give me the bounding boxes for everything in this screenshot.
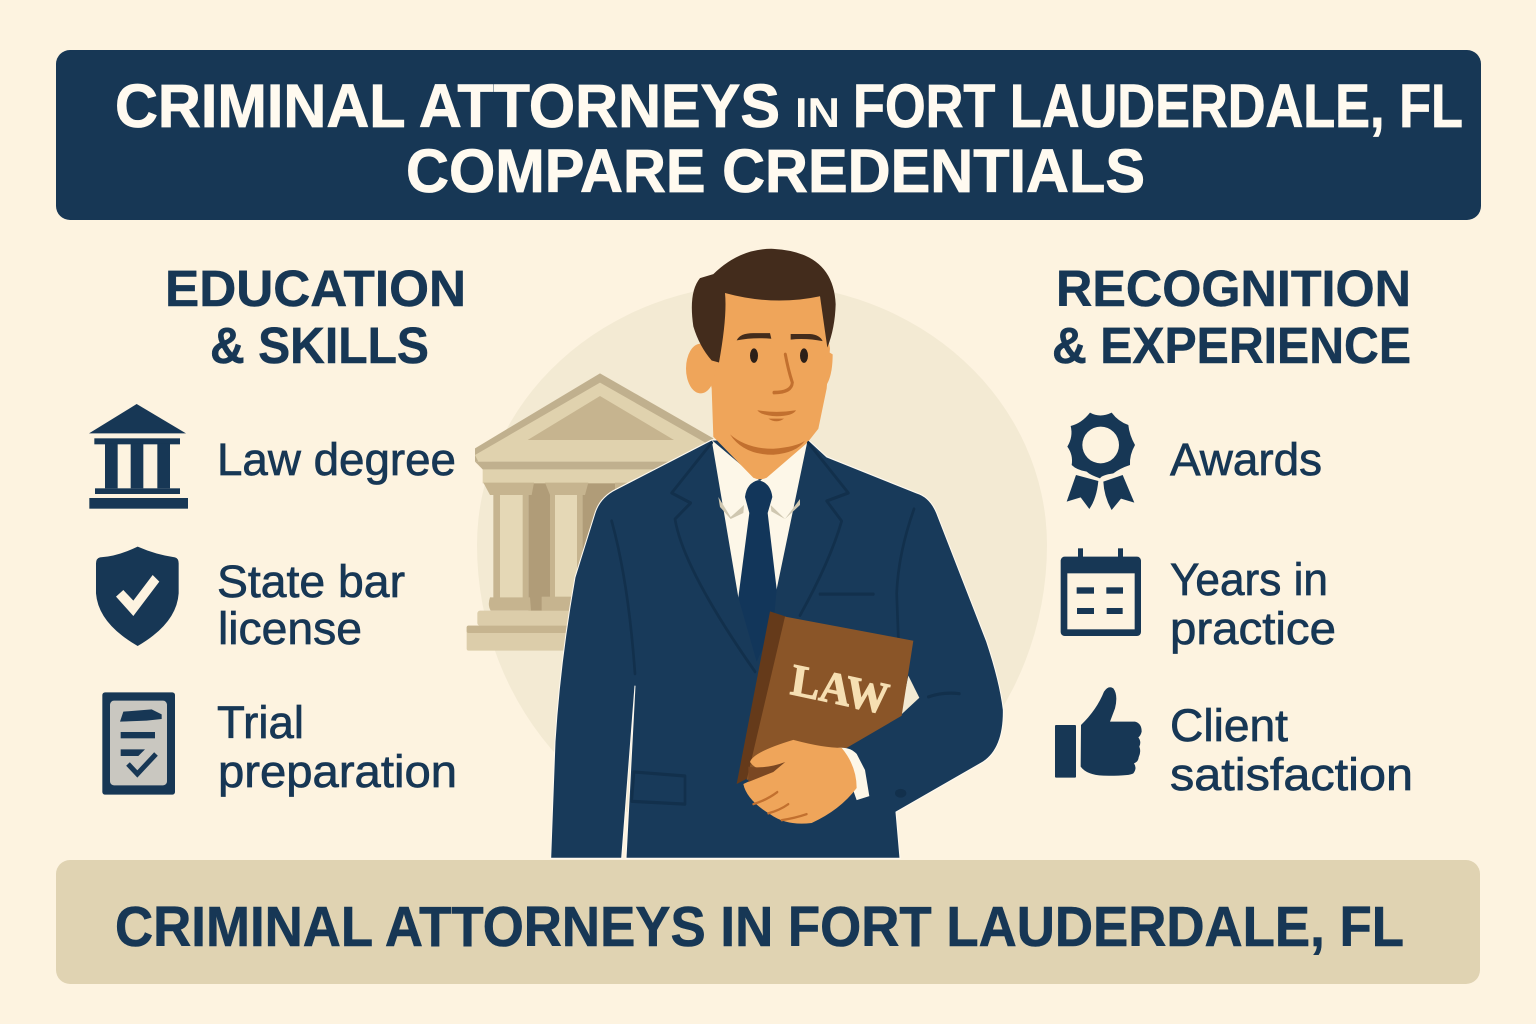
- icon: award ribbon: [1067, 413, 1135, 510]
- heading: recognition and experience: & EXPERIENCE: [1052, 317, 1411, 374]
- heading: education and skills: & SKILLS: [210, 317, 429, 374]
- heading: recognition and experience: RECOGNITION: [1056, 260, 1411, 317]
- label: years in practice: [1170, 554, 1336, 654]
- sleeve button: [895, 789, 906, 798]
- heading: education and skills: [165, 260, 466, 374]
- label: state bar license: [217, 556, 405, 654]
- gap between book and arm: [900, 676, 919, 716]
- necktie: [738, 480, 777, 662]
- label: state bar license: license: [218, 603, 362, 654]
- lapels and seams: [612, 443, 959, 804]
- label: state bar license: State bar: [217, 556, 405, 607]
- nose: [774, 354, 792, 393]
- icon: shield with check: [96, 547, 179, 646]
- icon: thumbs up: [1055, 687, 1142, 778]
- label: trial preparation: preparation: [218, 746, 457, 797]
- icon: courthouse illustration: [467, 373, 713, 651]
- suit jacket: [551, 440, 1003, 858]
- chin line: [730, 434, 805, 455]
- label: trial preparation: Trial: [217, 697, 304, 748]
- heading: recognition and experience: [1052, 260, 1411, 374]
- panel: recognition and experience: [1052, 260, 1413, 800]
- label: law degree: Law degree: [217, 434, 456, 485]
- eyebrows: [737, 333, 823, 341]
- background circle: [477, 284, 1047, 848]
- shirt: [712, 440, 808, 625]
- icon: courthouse: [89, 404, 188, 509]
- footer banner: [56, 860, 1480, 984]
- hair: [692, 249, 836, 362]
- footer text: CRIMINAL ATTORNEYS IN FORT LAUDERDALE, FL: [115, 895, 1404, 959]
- hand: [743, 740, 857, 824]
- ears: [686, 344, 715, 393]
- label: client satisfaction: satisfaction: [1170, 749, 1413, 800]
- label: awards: Awards: [1170, 434, 1322, 485]
- panel: education and skills: [89, 260, 466, 797]
- label: client satisfaction: Client: [1170, 700, 1288, 751]
- icon: checklist clipboard: [102, 692, 175, 795]
- title line 1: CRIMINAL ATTORNEYS: [115, 72, 780, 140]
- heading: education and skills: EDUCATION: [165, 260, 466, 317]
- title line 2: COMPARE CREDENTIALS: [406, 137, 1145, 205]
- shirt cuff: [838, 748, 869, 800]
- mouth: [757, 410, 796, 421]
- attorney figure: [551, 249, 1003, 858]
- label: years in practice: practice: [1170, 603, 1336, 654]
- label: trial preparation: [217, 697, 457, 797]
- icon: calendar: [1061, 548, 1141, 636]
- title banner: [56, 50, 1481, 220]
- label: client satisfaction: [1170, 700, 1413, 800]
- eyes: [750, 348, 758, 363]
- title line 1: [115, 72, 1463, 140]
- law book: [737, 611, 913, 784]
- book title: LAW: [788, 654, 892, 724]
- title line 1: IN: [795, 89, 840, 136]
- label: years in practice: Years in: [1170, 554, 1328, 605]
- neck and face: [707, 292, 830, 479]
